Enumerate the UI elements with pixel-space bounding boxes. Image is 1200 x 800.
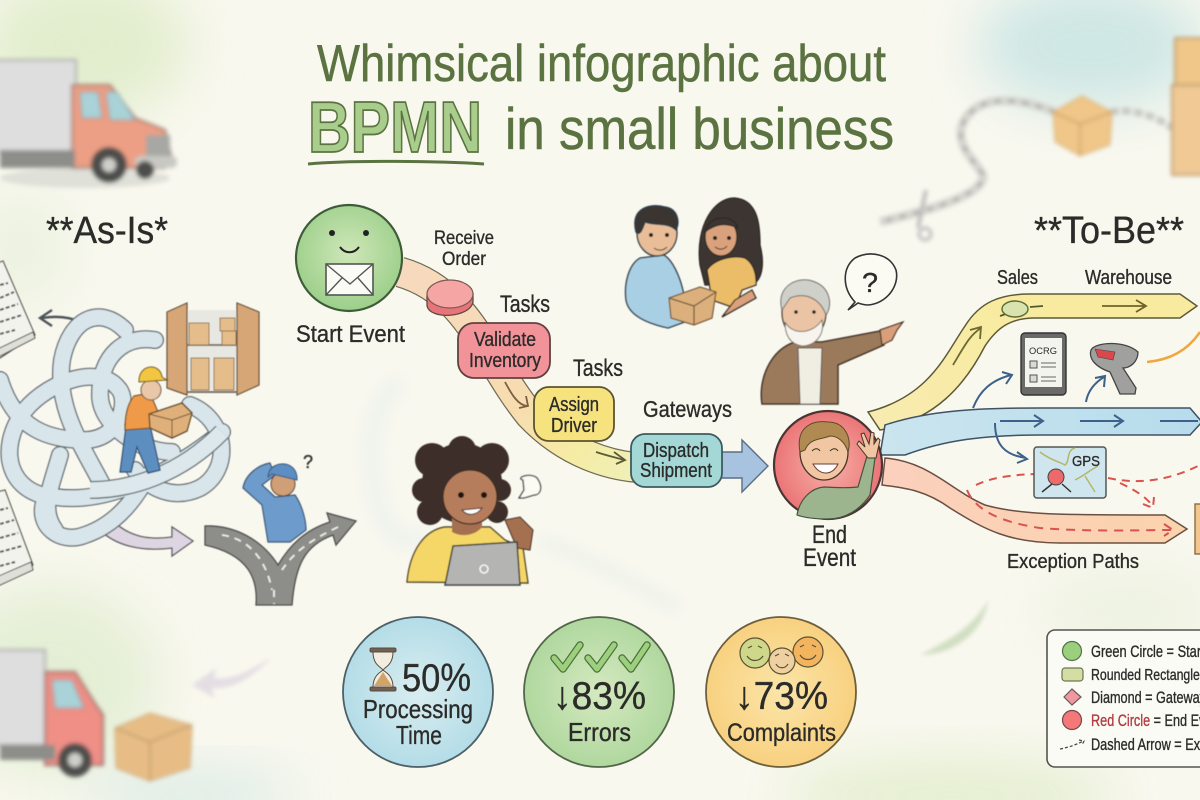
faint arrow bottom: [192, 657, 272, 698]
confused man: ?: [303, 452, 313, 472]
exception box at edge: [1195, 504, 1200, 554]
hard hat: [139, 367, 167, 382]
icon: GPS map: GPS: [1072, 453, 1100, 470]
end event: [774, 411, 882, 519]
gateway: dispatch shipment: Dispatch: [643, 440, 709, 462]
road fork: [205, 513, 356, 605]
tablet: [445, 542, 520, 585]
As-Is paper stack top: [0, 261, 35, 364]
faint leaf: [920, 600, 988, 655]
BPMN highlighted word: BPMN: [308, 88, 482, 168]
label: end event: [803, 521, 856, 572]
metric: processing time: [343, 617, 493, 767]
icon: hourglass: [370, 648, 396, 691]
receive order node: [427, 280, 473, 315]
heading: To-Be: **To-Be**: [1034, 210, 1184, 252]
route with boxes top right (blurred): [880, 38, 1200, 240]
label: tasks 2: Tasks: [573, 355, 623, 382]
carried box: [149, 403, 192, 438]
shirt: [407, 527, 528, 583]
arrow leaving the knot: [40, 310, 80, 326]
parcel bottom left (blurred): [115, 713, 192, 781]
task: assign driver: [534, 387, 614, 441]
confused man: [243, 452, 313, 542]
task: validate inventory: [458, 323, 550, 378]
metric: errors: Errors: [568, 717, 631, 747]
truck bottom left (blurred): [0, 650, 103, 777]
woman: [699, 198, 762, 317]
to-be swimlane: sales (yellow): [868, 294, 1197, 430]
icon: three check marks: [554, 645, 647, 669]
heading: As-Is: **As-Is*: [46, 210, 168, 252]
label: exception paths: Exception Paths: [1007, 551, 1139, 573]
title: Whimsical infographic about: [317, 35, 886, 93]
blue arrow to end event: [720, 440, 768, 492]
icon: envelope: [326, 264, 373, 295]
task: assign driver: Driver: [551, 415, 597, 437]
orange flow continuing off-canvas: [1147, 332, 1200, 362]
pale exit arrow: [100, 520, 193, 556]
process path ribbon: [400, 272, 650, 468]
title: in small business: [505, 97, 894, 162]
truck top left (blurred): [0, 60, 177, 188]
man: [626, 206, 690, 328]
gateway: dispatch shipment: [631, 434, 722, 487]
start event: [296, 205, 402, 311]
label: end event: End: [812, 521, 847, 549]
shirt: [125, 393, 158, 430]
metric: complaints: [706, 617, 856, 767]
afro hair: [412, 436, 511, 525]
couple exchanging package: [626, 198, 762, 328]
label: tasks 1: Tasks: [500, 291, 550, 318]
to-be swimlane: exceptions (peach): [882, 458, 1200, 543]
raised hand: [505, 517, 533, 550]
label: receive order: Order: [442, 248, 486, 270]
task: validate inventory: Inventory: [469, 350, 541, 372]
gateway: dispatch shipment: Shipment: [640, 460, 712, 482]
woman with tablet: [407, 436, 541, 585]
icon: tablet checklist: [1021, 333, 1066, 395]
icon: barcode scanner: [1090, 344, 1138, 394]
label: receive order: Receive: [434, 227, 494, 249]
As-Is paper stack bottom: [0, 490, 33, 592]
lane label: sales: Sales: [997, 267, 1038, 289]
metric: complaints: Complaints: [727, 719, 836, 747]
to-be swimlane: operations (blue): [880, 372, 1200, 463]
legend panel: [1047, 630, 1200, 767]
metric: processing time: Processing: [363, 694, 473, 724]
title: [308, 35, 894, 168]
label: gateways: Gateways: [643, 396, 732, 422]
icon: three smiley faces: [740, 637, 823, 674]
warehouse shelves: [167, 303, 259, 395]
mentor pointing: [761, 280, 903, 404]
icon: tablet checklist: OCRG: [1029, 346, 1057, 356]
label: end event: Event: [803, 544, 856, 572]
legs: [120, 425, 160, 473]
lane label: warehouse: Warehouse: [1085, 267, 1172, 289]
label: start event: Start Event: [296, 321, 405, 348]
tangled process ribbons: [0, 310, 222, 556]
parcel: [669, 287, 716, 325]
metric: errors: [524, 617, 674, 767]
label: receive order: [434, 227, 494, 270]
speech bubble with question mark: ?: [862, 267, 878, 298]
metric: processing time: Time: [396, 720, 442, 750]
metric: processing time: 50%: [402, 657, 471, 700]
face: [443, 470, 497, 524]
task: validate inventory: Validate: [474, 329, 536, 351]
task: assign driver: Assign: [549, 394, 599, 416]
speech bubble with question mark: [845, 254, 897, 310]
icon: GPS map: [1034, 447, 1106, 498]
metric: errors: ↓83%: [553, 675, 646, 718]
metric: complaints: ↓73%: [735, 675, 828, 718]
worker carrying box: [120, 367, 192, 473]
